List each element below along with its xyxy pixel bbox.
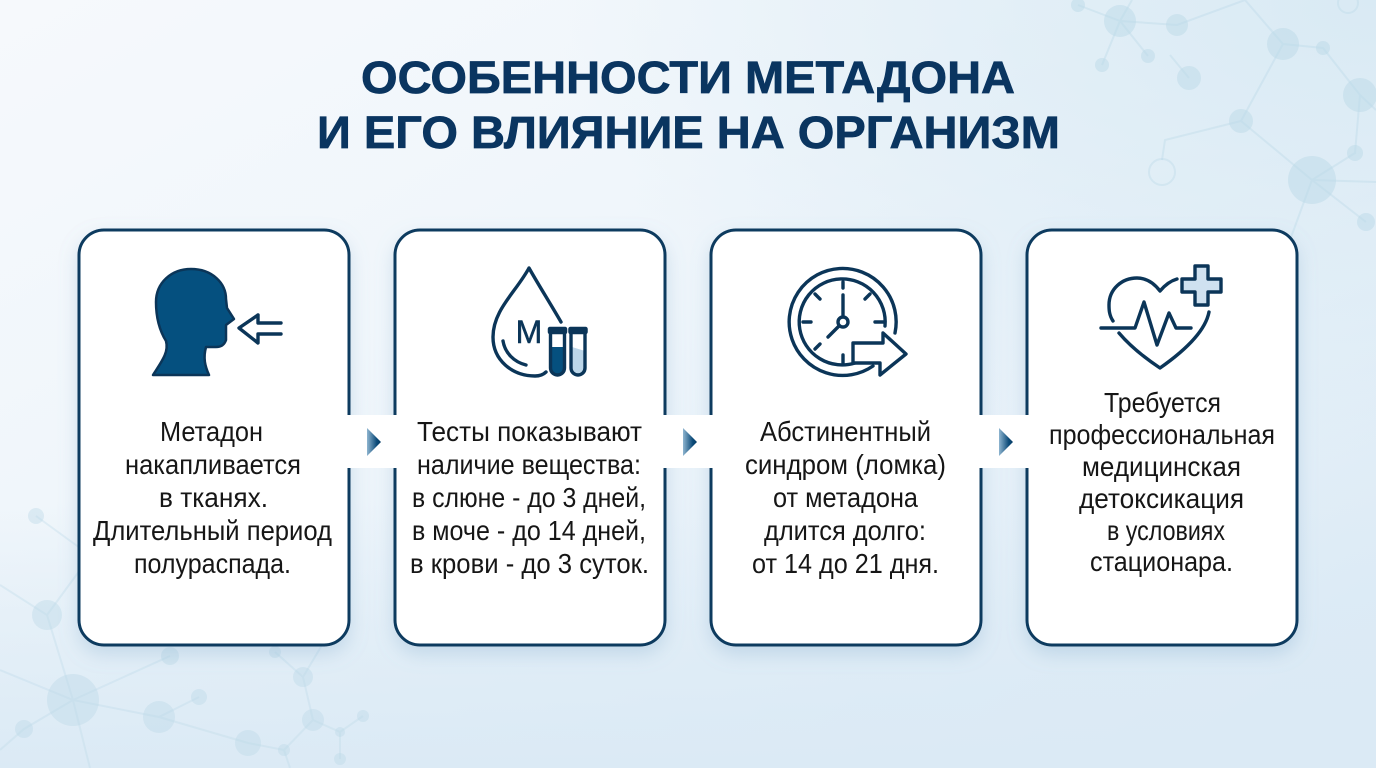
text: card 2: Тесты показывают bbox=[417, 416, 642, 447]
panel: card 2 tests bbox=[395, 230, 665, 645]
text: card 3 bbox=[745, 416, 946, 579]
text: card 1: накапливается bbox=[125, 449, 301, 480]
title: ОСОБЕННОСТИ МЕТАДОНА bbox=[361, 52, 1015, 103]
text: card 4: Требуется bbox=[1104, 387, 1221, 418]
text: card 1: Метадон bbox=[160, 416, 263, 447]
text: card 2: в моче - до 14 дней, bbox=[412, 515, 646, 546]
molecule network: top right bbox=[1071, 0, 1376, 240]
text: card 4: стационара. bbox=[1090, 546, 1233, 577]
icon: head inhaling bbox=[153, 269, 281, 375]
icon: heart with pulse and cross bbox=[1101, 266, 1221, 368]
text: card 1: полураспада. bbox=[134, 548, 291, 579]
text: card 2: в крови - до 3 суток. bbox=[410, 548, 649, 579]
text: card 1 bbox=[93, 416, 332, 579]
arrow: connector 3 bbox=[978, 415, 1030, 468]
panel: card 1 accumulation bbox=[79, 230, 349, 645]
title bbox=[317, 52, 1060, 158]
text: card 4: профессиональная bbox=[1049, 419, 1275, 450]
text: card 4: детоксикация bbox=[1079, 483, 1244, 514]
text: card 1: в тканях. bbox=[159, 482, 268, 513]
text: card 4: в условиях bbox=[1107, 515, 1225, 546]
panel: card 3 withdrawal bbox=[711, 230, 981, 645]
icon: drop and test tubes bbox=[493, 268, 587, 376]
icon: drop and test tubes: М bbox=[516, 314, 542, 350]
panel: card 4 detox bbox=[1027, 230, 1297, 645]
icon: clock with arrow bbox=[789, 268, 906, 375]
text: card 3: от метадона bbox=[773, 482, 918, 513]
text: card 1: Длительный период bbox=[93, 515, 332, 546]
molecule network: bottom left bbox=[0, 508, 369, 768]
text: card 3: синдром (ломка) bbox=[745, 449, 946, 480]
text: card 4 bbox=[1049, 387, 1275, 577]
title: И ЕГО ВЛИЯНИЕ НА ОРГАНИЗМ bbox=[317, 107, 1060, 158]
arrow: connector 2 bbox=[662, 415, 714, 468]
text: card 3: от 14 до 21 дня. bbox=[752, 548, 939, 579]
arrow: connector 1 bbox=[346, 415, 398, 468]
text: card 2 bbox=[410, 416, 649, 579]
text: card 4: медицинская bbox=[1082, 451, 1241, 482]
text: card 2: наличие вещества: bbox=[417, 449, 641, 480]
text: card 3: длится долго: bbox=[764, 515, 926, 546]
text: card 2: в слюне - до 3 дней, bbox=[412, 482, 646, 513]
text: card 3: Абстинентный bbox=[760, 416, 931, 447]
